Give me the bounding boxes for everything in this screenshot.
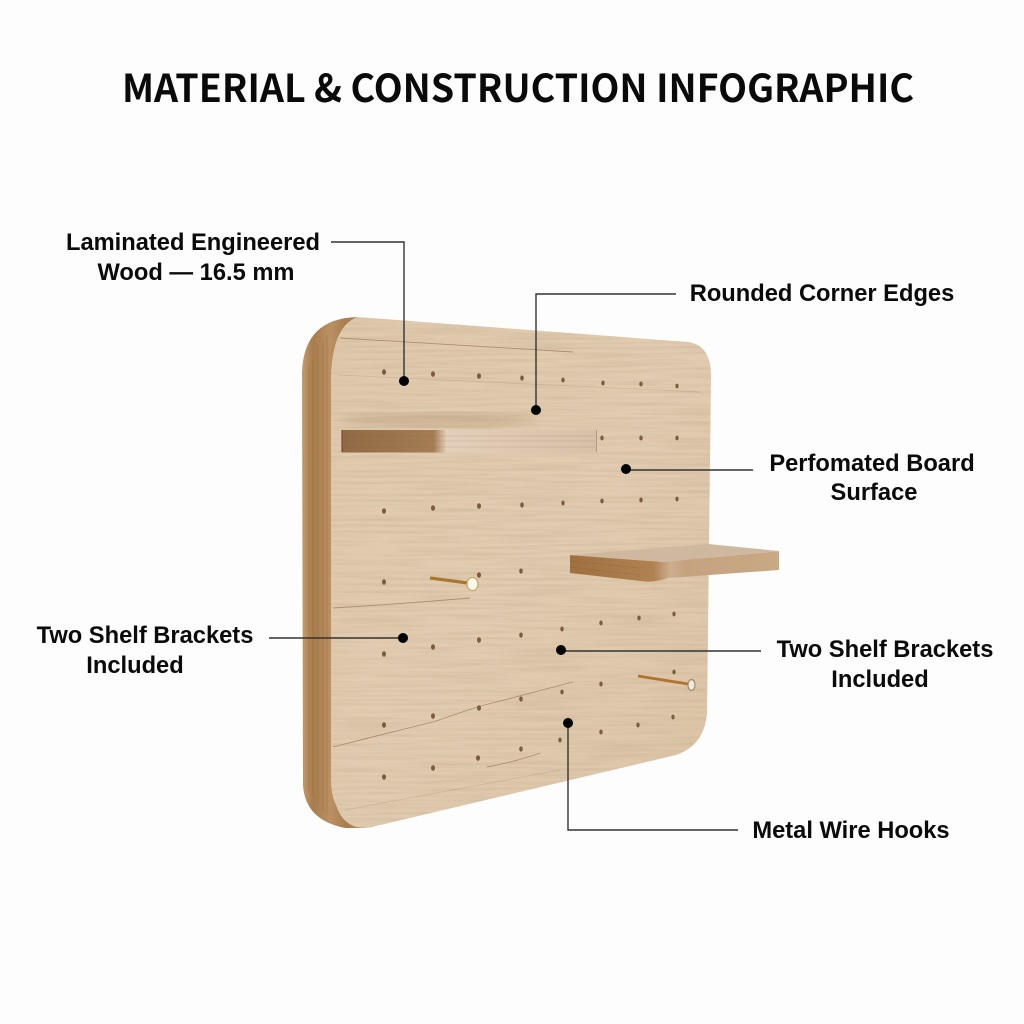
- callout: metal wire hooks: [563, 718, 950, 844]
- callout: laminated engineered wood: Wood — 16.5 mm: [98, 260, 294, 286]
- callout: two shelf brackets right: Included: [831, 667, 929, 693]
- metal wire hook right: [638, 676, 695, 690]
- peg holes: [382, 369, 679, 780]
- upper shelf: [342, 430, 597, 452]
- title: MATERIAL & CONSTRUCTION INFOGRAPHIC: [122, 58, 914, 114]
- board edge: [302, 317, 365, 828]
- callout: two shelf brackets left: Two Shelf Brackets: [37, 623, 253, 649]
- callout: perforated board surface: Surface: [831, 480, 917, 506]
- wood grain: [325, 310, 720, 835]
- callout: two shelf brackets left: [37, 623, 408, 679]
- callout: two shelf brackets left: Included: [86, 653, 184, 679]
- board face: [331, 317, 711, 828]
- metal wire hook left: [430, 578, 478, 590]
- callout: rounded corner edges: Rounded Corner Edges: [690, 281, 954, 307]
- lower shelf: [570, 544, 779, 582]
- callout: two shelf brackets right: [556, 637, 993, 693]
- callout: metal wire hooks: Metal Wire Hooks: [752, 818, 950, 844]
- callout: perforated board surface: Perfomated Board: [769, 451, 975, 477]
- callout: rounded corner edges: [531, 281, 954, 415]
- pegboard: [302, 310, 779, 835]
- callout: perforated board surface: [621, 451, 975, 506]
- callout: laminated engineered wood: Laminated Engineered: [66, 230, 320, 256]
- callout: laminated engineered wood: [66, 230, 409, 386]
- callout: two shelf brackets right: Two Shelf Brackets: [777, 637, 993, 663]
